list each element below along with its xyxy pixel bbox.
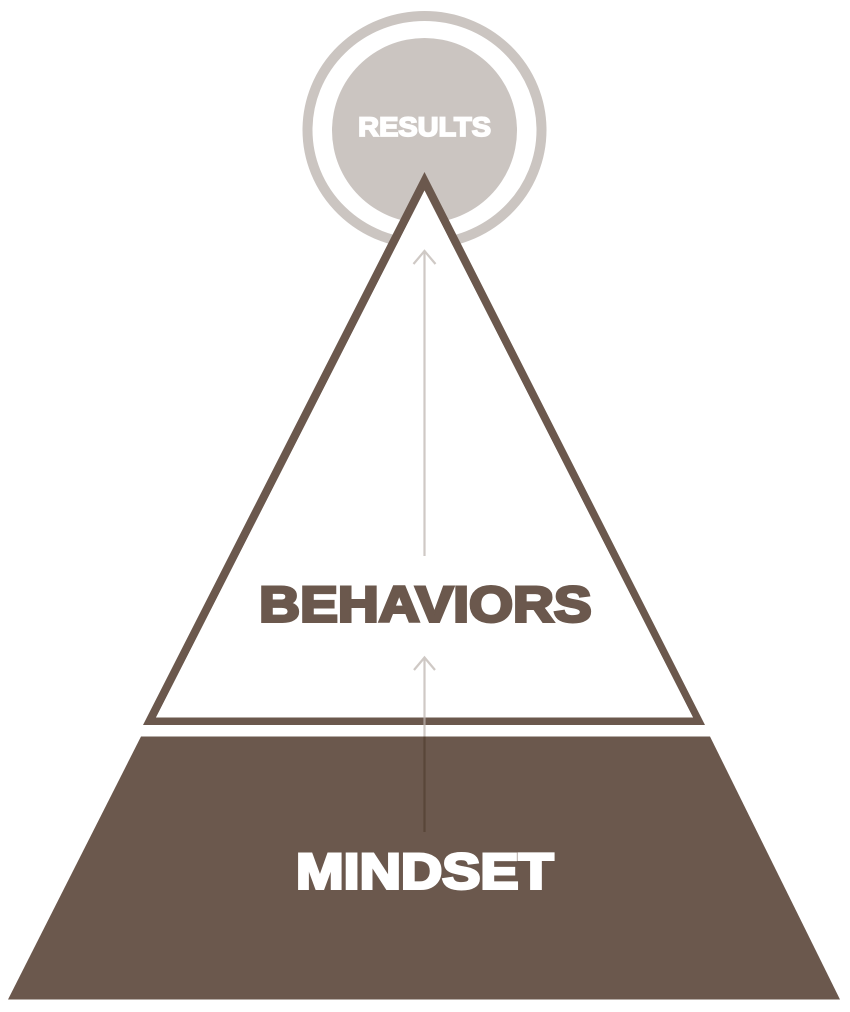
results circle (308, 16, 542, 244)
white triangle interior (156, 190, 693, 718)
mindset label: MINDSET (296, 844, 554, 900)
arrow: behaviors to results (414, 251, 436, 556)
arrow: mindset to behaviors (414, 657, 435, 832)
behaviors label: BEHAVIORS (259, 576, 592, 632)
results label: RESULTS (358, 112, 491, 142)
mindset trapezoid (8, 736, 840, 1000)
outer ring (308, 16, 542, 244)
behaviors triangle (143, 172, 705, 725)
inner disc (332, 38, 517, 223)
